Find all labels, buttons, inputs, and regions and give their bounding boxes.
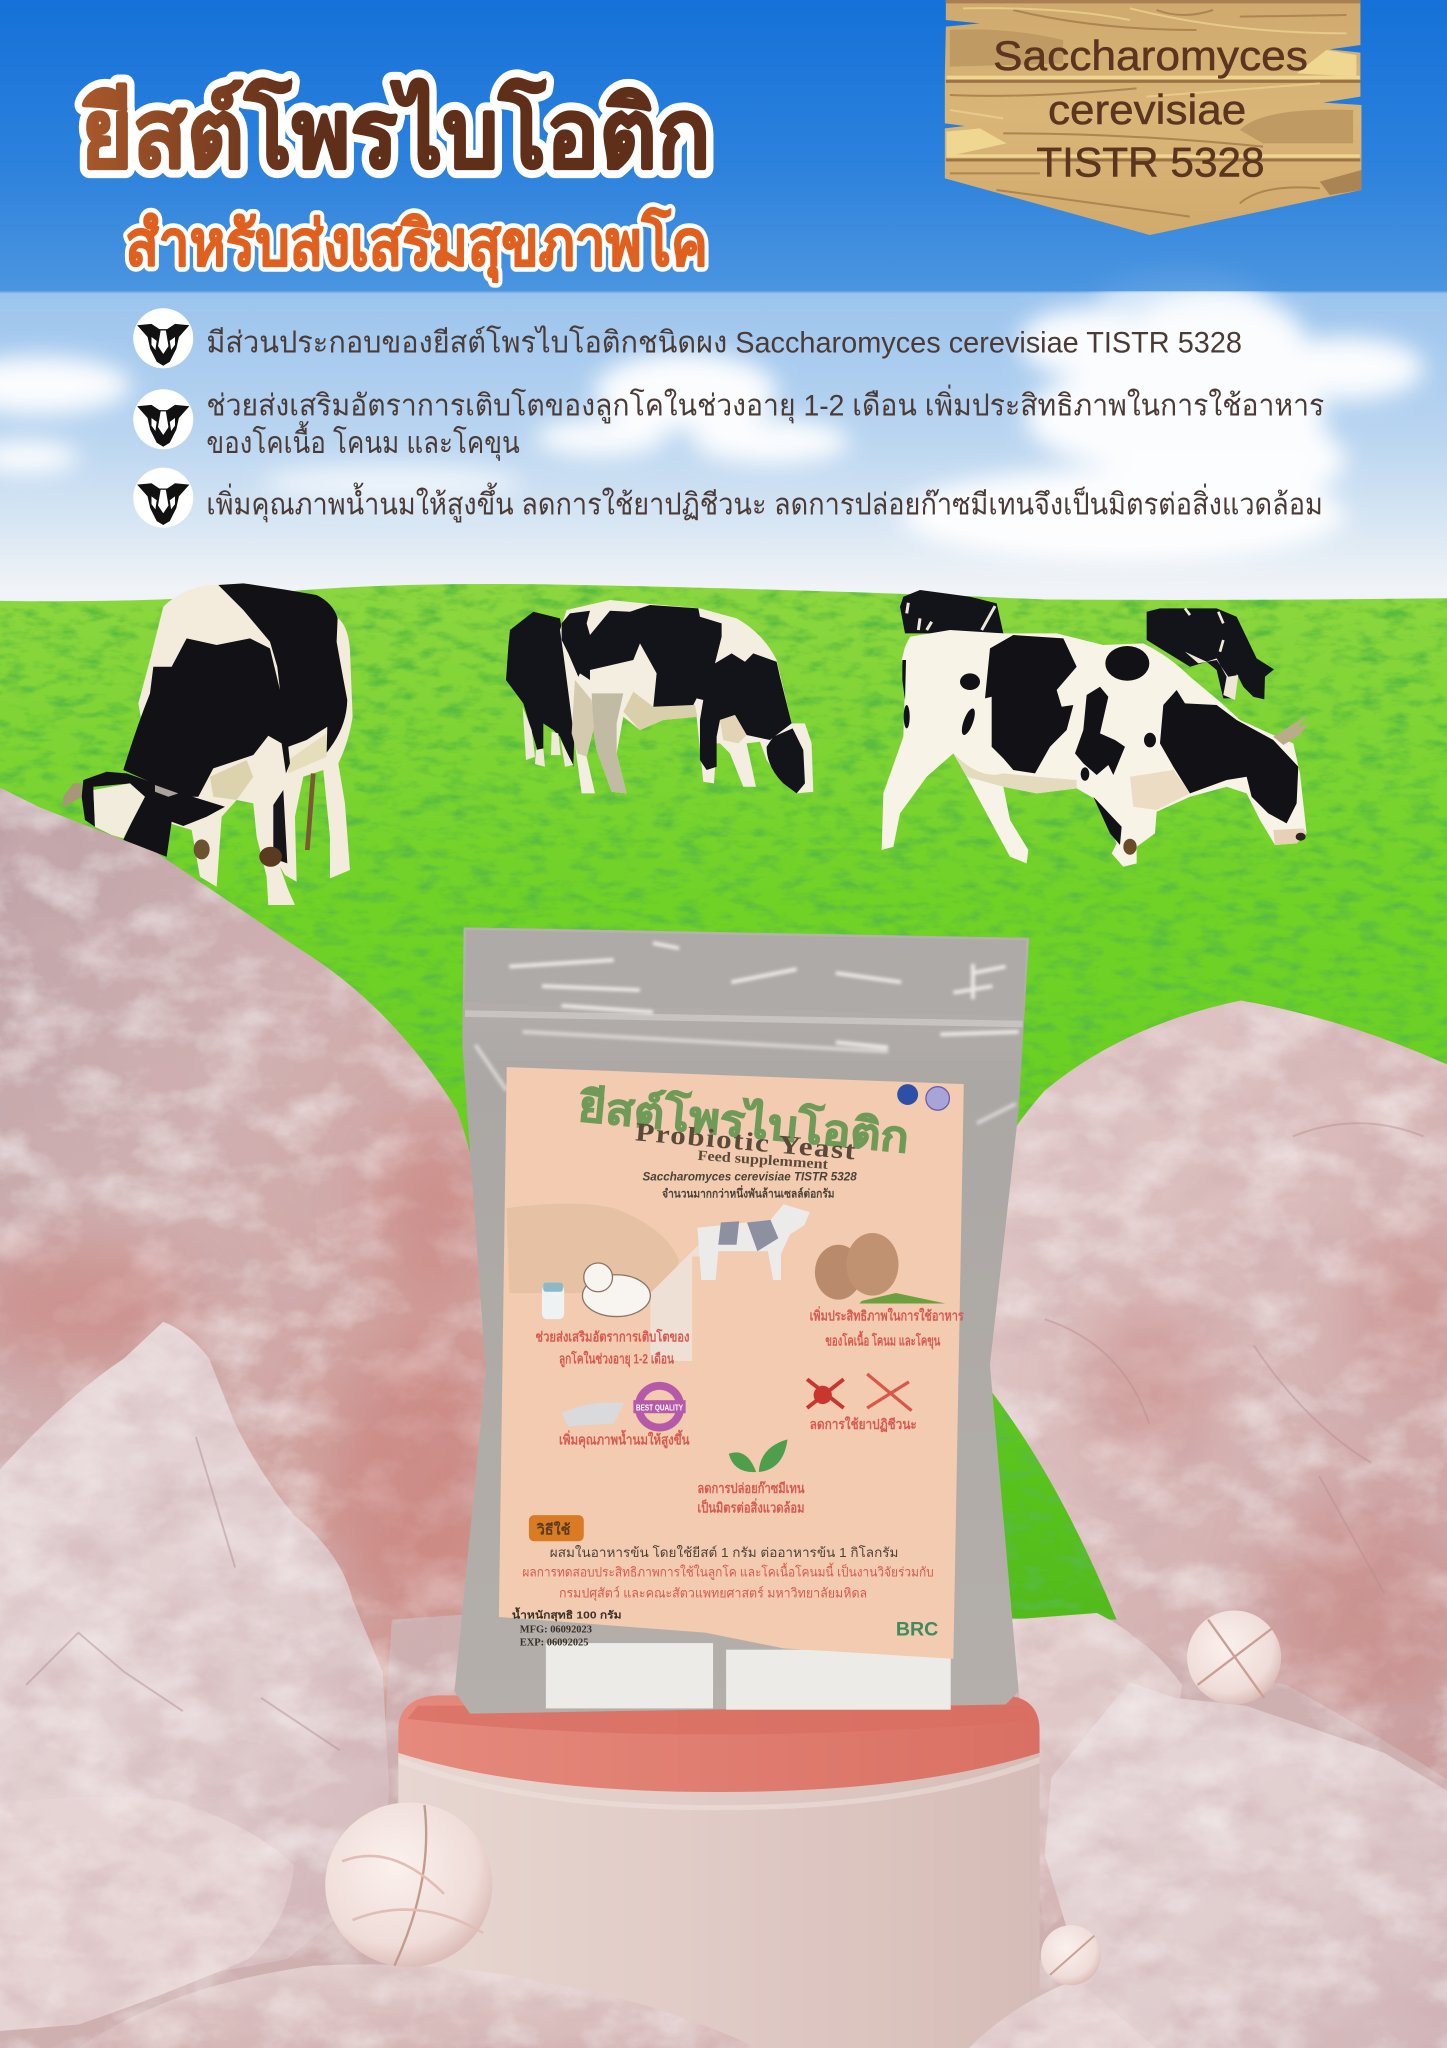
rock: bottom centre: [78, 1964, 757, 2048]
product label: เพิ่มคุณภาพน้ำนมให้สูงขึ้น: [559, 1430, 690, 1449]
rock cracks on right boulder: [1045, 1123, 1423, 1593]
sign text: Saccharomyces: [993, 32, 1308, 79]
title: ยีสต์โพรไบโอติก: [81, 78, 710, 188]
product label: [499, 1067, 964, 1659]
icon: cow head bullet 3: [133, 468, 193, 528]
wood grain: [946, 2, 1361, 217]
icon: hay bales: [815, 1233, 946, 1304]
rock: right boulder: [974, 1000, 1447, 1779]
product label: ยีสต์โพรไบโอติก: [576, 1080, 911, 1162]
product label: Probiotic Yeast: [634, 1117, 858, 1166]
label: usage tag: วิธีใช้: [536, 1521, 571, 1539]
left boulder red shading: [0, 1123, 509, 1620]
product label: เพิ่มประสิทธิภาพในการใช้อาหาร: [810, 1305, 964, 1323]
product label: EXP: 06092025: [520, 1638, 588, 1649]
bullet text 2: ของโคเนื้อ โคนม และโคขุน: [206, 421, 520, 462]
icon: cow head bullet 1: [133, 308, 193, 368]
product label: ผลการทดสอบประสิทธิภาพการใช้ในลูกโค และโคเนื้อโคนมนี้ เป็นงานวิจัยร่วมกับ: [522, 1562, 934, 1580]
product label: ของโคเนื้อ โคนม และโคขุน: [825, 1330, 941, 1349]
cow: black cow behind: [506, 612, 575, 767]
product bag: [454, 927, 1029, 1714]
icon: green leaves: [729, 1439, 787, 1472]
bullet text 2: [206, 384, 1324, 462]
bullet text 1: มีส่วนประกอบของยีสต์โพรไบโอติกชนิดผง Saccharomyces cerevisiae TISTR 5328: [206, 325, 1242, 360]
product label: น้ำหนักสุทธิ 100 กรัม: [512, 1606, 622, 1622]
subtitle: สำหรับส่งเสริมสุขภาพโค: [125, 207, 708, 282]
subtitle: สำหรับส่งเสริมสุขภาพโค: [125, 207, 708, 282]
bullet text 2: ช่วยส่งเสริมอัตราการเติบโตของลูกโคในช่วงอายุ 1-2 เดือน เพิ่มประสิทธิภาพในการใช้อาหาร: [206, 384, 1324, 424]
product label: กรมปศุสัตว์ และคณะสัตวแพทยศาสตร์ มหาวิทยาลัยมหิดล: [559, 1585, 867, 1601]
product label: เป็นมิตรต่อสิ่งแวดล้อม: [697, 1497, 804, 1515]
cow: far back centre: [900, 590, 1003, 633]
product label: จำนวนมากกว่าหนึ่งพันล้านเซลล์ต่อกรัม: [662, 1185, 835, 1201]
rock: bottom right large: [1045, 1682, 1447, 2048]
rock: front left round: [0, 1797, 294, 2031]
sign text: cerevisiae: [1048, 86, 1246, 133]
icon: cow on label: [697, 1204, 810, 1280]
rock: left back boulder: [0, 788, 490, 1829]
product label: ช่วยส่งเสริมอัตราการเติบโตของ: [535, 1327, 690, 1344]
grass field: [0, 584, 1447, 1829]
right boulder red shading: [1084, 1228, 1447, 1711]
sign text: [993, 32, 1308, 186]
rock: back right low: [1012, 1613, 1182, 1933]
rock: backing mass: [0, 1437, 1447, 2048]
product label: MFG: 06092023: [520, 1625, 592, 1636]
product label: BRC: [896, 1618, 938, 1640]
sky background with clouds: [0, 0, 1447, 784]
wooden sign: [945, 0, 1361, 235]
sign text: TISTR 5328: [1036, 139, 1265, 186]
rock: front left tall: [0, 1322, 389, 2011]
product label: ลดการปล่อยก๊าซมีเทน: [697, 1480, 805, 1496]
product label: ลูกโคในช่วงอายุ 1-2 เดือน: [559, 1350, 674, 1368]
label: usage tag: [529, 1515, 584, 1541]
cow: foreground left: [63, 583, 353, 905]
cow: centre grazing: [560, 600, 813, 793]
icon: no antibiotics: [807, 1374, 912, 1411]
cow: far right: [1147, 608, 1274, 700]
icon: calf and bottle: [542, 1263, 650, 1319]
product label: ลดการใช้ยาปฏิชีวนะ: [810, 1416, 917, 1433]
logos: [897, 1084, 949, 1110]
sphere: bottom right small: [1041, 1925, 1101, 1985]
podium: [398, 1695, 1040, 2048]
product label: Feed supplemment: [697, 1148, 829, 1173]
icon: cow head bullet 2: [133, 389, 193, 449]
title: ยีสต์โพรไบโอติก: [81, 78, 710, 188]
icon: best quality stamp: BEST QUALITY: [636, 1403, 683, 1413]
rock: bottom right small: [969, 1975, 1162, 2048]
product label: ผสมในอาหารข้น โดยใช้ยีสต์ 1 กรัม ต่ออาหารข้น 1 กิโลกรัม: [550, 1545, 898, 1560]
bullet text 3: เพิ่มคุณภาพน้ำนมให้สูงขึ้น ลดการใช้ยาปฏิชีวนะ ลดการปล่อยก๊าซมีเทนจึงเป็นมิตรต่อสิ่งแวดล้อม: [206, 483, 1323, 524]
bag glints: [475, 943, 1019, 1123]
rock cracks on front left: [26, 1437, 340, 1750]
sphere: upper right: [1187, 1610, 1281, 1704]
product label: Saccharomyces cerevisiae TISTR 5328: [643, 1170, 857, 1184]
icon: milk splash: [562, 1402, 624, 1426]
icon: best quality stamp: [633, 1382, 686, 1432]
cow: foreground right: [882, 630, 1308, 867]
sphere: bottom left: [325, 1802, 492, 1967]
